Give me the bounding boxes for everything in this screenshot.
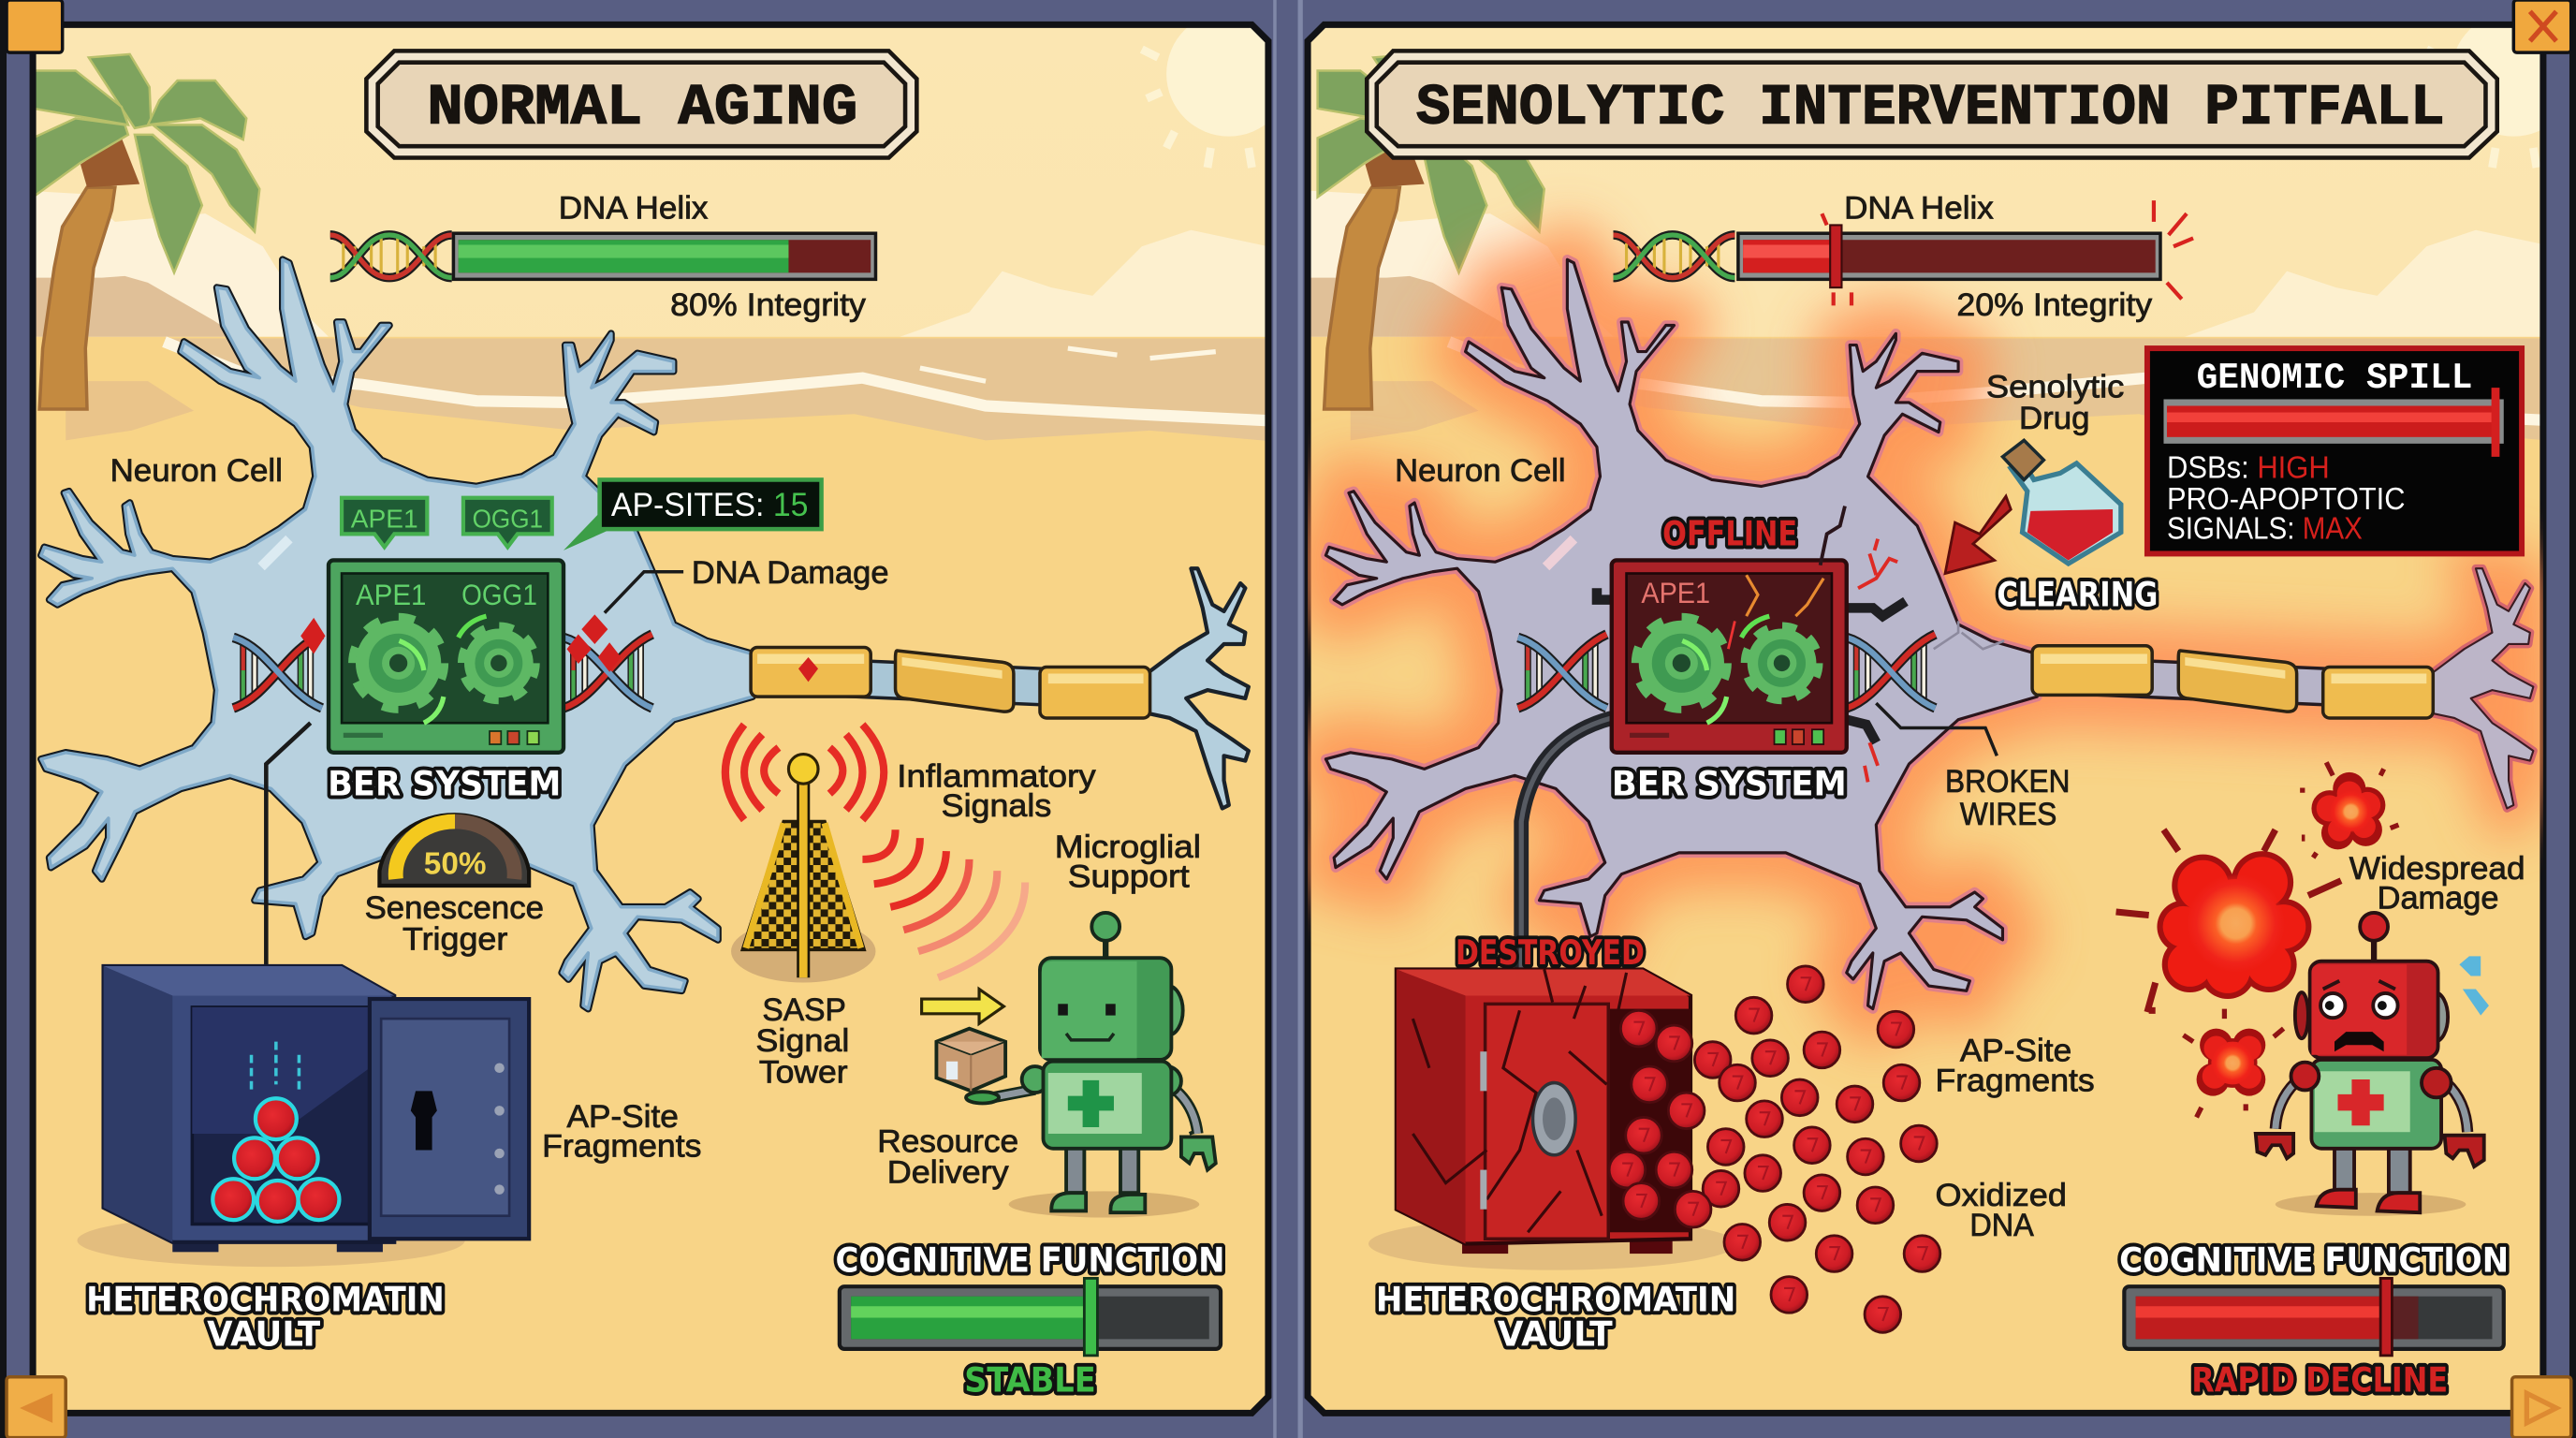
- tag: APE1: APE1: [351, 504, 418, 533]
- panel: senolytic intervention pitfall: [1284, 0, 2576, 1438]
- DNA helix integrity bar, critical: [1614, 190, 2193, 323]
- label: oxidized DNA: Oxidized: [1936, 1178, 2067, 1213]
- connector: BER to vault: [266, 723, 311, 977]
- broken black wires: [1597, 588, 1906, 742]
- label: clearing: CLEARING: [1997, 575, 2158, 615]
- label: inflammatory signals: Signals: [942, 788, 1051, 824]
- BER system machine: [329, 560, 564, 753]
- label: AP-site fragments: AP-Site: [1960, 1034, 2071, 1069]
- sparks and crack near BER: [1821, 506, 1897, 782]
- BER system machine: OGG1: [461, 578, 537, 611]
- panel background: beach scene: [1284, 0, 2576, 1438]
- label: resource delivery: Resource: [877, 1123, 1018, 1159]
- label: cognitive function: COGNITIVE FUNCTION: [2119, 1240, 2509, 1280]
- label: AP-site fragments: AP-Site: [567, 1099, 679, 1135]
- BER system machine, damaged: APE1: [1641, 576, 1710, 609]
- label: DNA damage with leader: DNA Damage: [692, 555, 889, 591]
- label: 80% integrity: 80% Integrity: [670, 287, 867, 323]
- label: oxidized DNA: DNA: [1969, 1208, 2034, 1243]
- label: resource delivery: [877, 1123, 1018, 1191]
- label: heterochromatin vault: [86, 1280, 445, 1354]
- label: neuron cell: Neuron Cell: [110, 453, 283, 489]
- label: broken wires with leader: BROKEN: [1945, 764, 2070, 800]
- label: DNA helix: DNA Helix: [1844, 190, 1994, 226]
- thick cable from vault to BER: [1521, 718, 1612, 969]
- label: DNA helix: DNA Helix: [559, 190, 708, 226]
- panel: genomic spill readout: GENOMIC SPILL: [2197, 358, 2472, 399]
- cognitive function meter: [835, 1240, 1224, 1401]
- tag: APE1: [342, 498, 427, 547]
- panel background: beach scene: [0, 0, 1298, 1438]
- panel: normal aging: [0, 0, 1298, 1438]
- label: heterochromatin vault: VAULT: [1498, 1313, 1613, 1354]
- label: senolytic drug: Senolytic: [1986, 370, 2124, 405]
- label: resource delivery: Delivery: [887, 1155, 1010, 1191]
- icon: back button bottom-left: [7, 1377, 66, 1438]
- label: heterochromatin vault: VAULT: [207, 1313, 320, 1354]
- label: offline: OFFLINE: [1662, 514, 1797, 554]
- label: senescence trigger: Trigger: [402, 921, 507, 957]
- icon: healthy microglia robot with package: [936, 913, 1216, 1217]
- icon: distressed red robot: [2256, 913, 2484, 1216]
- label: rapid decline: RAPID DECLINE: [2191, 1360, 2448, 1401]
- explosion: large: [2116, 829, 2341, 1012]
- label: widespread damage: Widespread: [2349, 851, 2525, 887]
- label: SASP signal tower: Tower: [759, 1055, 848, 1091]
- axon myelin sheaths: [751, 647, 1150, 718]
- label: broken wires with leader: [1876, 703, 2070, 832]
- heading: normal aging: [366, 51, 916, 157]
- label: neuron cell: Neuron Cell: [1395, 453, 1566, 489]
- cognitive function meter, declining: [2119, 1240, 2509, 1401]
- panel: genomic spill readout: PRO-APOPTOTIC: [2167, 482, 2405, 517]
- arrow: clearing action: [1945, 496, 2011, 574]
- label: senescence trigger: Senescence: [365, 890, 544, 926]
- label: DNA damage with leader: [605, 555, 889, 613]
- label: inflammatory signals: Inflammatory: [897, 759, 1097, 795]
- label: inflammatory signals: [897, 759, 1097, 824]
- heading: senolytic intervention pitfall: [1367, 51, 2497, 157]
- label: AP-site fragments: [1936, 1034, 2095, 1098]
- panel: genomic spill readout: [2147, 348, 2522, 553]
- neuron cell body: [41, 259, 1249, 1009]
- heading: senolytic intervention pitfall: SENOLYTIC INTERVENTION PITFALL: [1416, 77, 2445, 141]
- label: senolytic drug: [1986, 370, 2124, 436]
- icon: sweat drops: [2459, 956, 2489, 1016]
- BER system machine: APE1: [356, 578, 426, 611]
- icon: SASP signal tower: [725, 725, 1025, 983]
- label: widespread damage: [2349, 851, 2525, 917]
- icon: heterochromatin vault, open and intact: [77, 966, 529, 1267]
- label: BER system: BER SYSTEM: [1612, 763, 1847, 803]
- scattered oxidized DNA fragments: [1609, 966, 1940, 1332]
- senescence trigger gauge: [379, 814, 529, 886]
- heading: normal aging: NORMAL AGING: [427, 77, 857, 141]
- label: broken wires with leader: WIRES: [1960, 797, 2056, 832]
- dna repair helices beside BER box: [233, 614, 652, 708]
- label: AP-site fragments: [542, 1099, 701, 1165]
- label: heterochromatin vault: HETEROCHROMATIN: [1376, 1280, 1735, 1320]
- label: cognitive function: COGNITIVE FUNCTION: [835, 1240, 1224, 1280]
- label: SASP signal tower: SASP: [762, 992, 846, 1028]
- label: destroyed: DESTROYED: [1456, 932, 1645, 973]
- DNA helix integrity bar: [330, 190, 877, 323]
- panel: genomic spill readout: SIGNALS: MAX: [2167, 512, 2363, 547]
- panel: genomic spill readout: DSBs: HIGH: [2167, 451, 2330, 486]
- label: widespread damage: Damage: [2378, 881, 2499, 917]
- label: heterochromatin vault: [1376, 1280, 1735, 1354]
- label: AP-site fragments: Fragments: [1936, 1063, 2095, 1098]
- icon: heterochromatin vault, cracked and destroyed: [1368, 969, 1736, 1270]
- label: heterochromatin vault: HETEROCHROMATIN: [86, 1280, 445, 1320]
- label: oxidized DNA: [1936, 1178, 2067, 1243]
- callout: AP-sites counter: AP-SITES: 15: [611, 487, 809, 523]
- label: microglial support: [1055, 829, 1201, 895]
- tag: OGG1: [463, 498, 552, 547]
- senescence trigger gauge: 50%: [424, 847, 487, 882]
- icon: top-left corner button: [7, 0, 63, 52]
- explosion: small top: [2300, 762, 2398, 858]
- axon myelin sheaths: [2032, 646, 2433, 718]
- icon: forward button bottom-right: [2512, 1377, 2571, 1438]
- label: senescence trigger: [365, 890, 544, 957]
- label: BER system: BER SYSTEM: [328, 763, 561, 803]
- icon: senolytic drug flask: [2002, 440, 2121, 564]
- label: 20% integrity: 20% Integrity: [1956, 287, 2153, 323]
- label: senolytic drug: Drug: [2019, 401, 2089, 436]
- label: microglial support: Microglial: [1055, 829, 1201, 865]
- callout: AP-sites counter: [564, 479, 822, 550]
- tag: OGG1: OGG1: [473, 504, 543, 533]
- neuron cell under stress with inflammation glow: [1325, 259, 2533, 1009]
- label: AP-site fragments: Fragments: [542, 1129, 701, 1165]
- icon: resource delivery arrow: [922, 990, 1003, 1023]
- label: microglial support: Support: [1068, 859, 1190, 895]
- label: SASP signal tower: [755, 992, 849, 1091]
- label: stable: STABLE: [964, 1360, 1096, 1401]
- BER system machine, damaged: [1612, 560, 1847, 753]
- explosion: small bottom: [2184, 1009, 2284, 1117]
- label: SASP signal tower: Signal: [755, 1023, 849, 1059]
- icon: close button top-right: [2513, 0, 2571, 52]
- failed DNA repair helices: [1518, 634, 1936, 708]
